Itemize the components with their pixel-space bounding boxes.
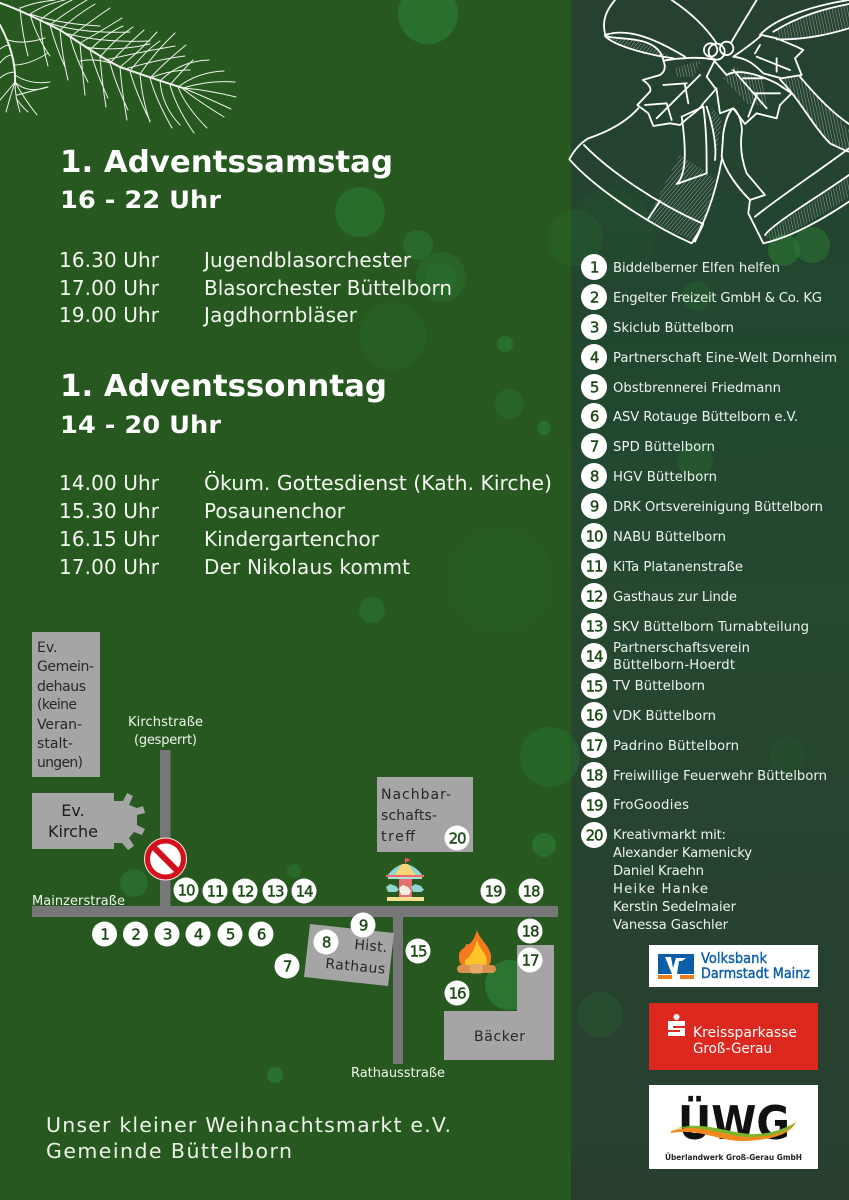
marker 18 lower	[518, 918, 542, 944]
label: Rathausstrasse: Rathausstraße	[351, 1066, 445, 1081]
icon: carousel	[386, 858, 424, 901]
legend item 19	[581, 792, 689, 818]
marker 13: 13	[267, 882, 284, 900]
marker 14	[292, 878, 316, 904]
legend item 20: Kerstin Sedelmaier	[613, 900, 737, 915]
legend item 16: VDK Büttelborn	[613, 709, 716, 724]
legend list	[581, 254, 837, 933]
legend item 13: SKV Büttelborn Turnabteilung	[613, 620, 809, 635]
legend item 11: KiTa Platanenstraße	[613, 560, 743, 575]
schedule: Sunday: 16.15 Uhr	[59, 527, 160, 551]
legend item 8	[581, 463, 717, 489]
building: Ev. Kirche	[32, 793, 145, 850]
building: Ev. Gemeindehaus	[32, 632, 100, 777]
legend item 16: 16	[586, 706, 603, 724]
building: Hist. Rathaus: Hist.	[354, 937, 388, 956]
building: Hist. Rathaus	[304, 924, 394, 986]
marker 4	[186, 922, 210, 946]
building: Baecker	[444, 945, 554, 1060]
bokeh lights	[120, 0, 830, 1083]
building: Baecker: Bäcker	[474, 1029, 525, 1045]
background: dark sidebar	[571, 0, 849, 1200]
marker 20: 20	[449, 830, 466, 848]
marker 11	[202, 878, 228, 904]
marker 6	[248, 922, 274, 946]
building: Ev. Gemeindehaus: Veran-	[37, 717, 82, 733]
legend item 2	[581, 284, 822, 310]
legend item 18	[581, 762, 827, 788]
legend item 17	[581, 732, 739, 758]
legend item 11	[581, 553, 743, 579]
legend item 20: Heike Hanke	[613, 882, 708, 897]
legend item 6: 6	[590, 408, 599, 426]
legend item 18: Freiwillige Feuerwehr Büttelborn	[613, 769, 827, 784]
marker 11: 11	[207, 882, 224, 900]
legend item 6: ASV Rotauge Büttelborn e.V.	[613, 410, 798, 425]
schedule: Sunday: 14.00 Uhr	[59, 471, 160, 495]
legend item 5: Obstbrennerei Friedmann	[613, 381, 781, 396]
logo: UEWG: Überlandwerk Groß-Gerau GmbH	[665, 1152, 802, 1162]
legend item 10: 10	[586, 528, 603, 546]
marker 16	[444, 980, 470, 1006]
building: Ev. Gemeindehaus: dehaus	[37, 679, 86, 695]
marker 12	[232, 878, 258, 904]
legend item 7	[581, 433, 715, 459]
footer text	[46, 1113, 451, 1163]
legend item 19: 19	[586, 796, 603, 814]
marker 3	[154, 922, 180, 946]
building: Nachbarschaftstreff: schafts-	[381, 808, 437, 824]
legend item 3: Skiclub Büttelborn	[613, 321, 734, 336]
schedule: Sunday: 15.30 Uhr	[59, 499, 160, 523]
schedule: Sunday: Der Nikolaus kommt	[204, 555, 410, 579]
building: Nachbarschaftstreff: treff	[381, 829, 415, 845]
legend item 1: 1	[590, 258, 599, 276]
marker 10: 10	[178, 882, 195, 900]
marker 2	[123, 922, 148, 946]
legend item 12	[581, 583, 737, 609]
legend item 4: Partnerschaft Eine-Welt Dornheim	[613, 351, 837, 366]
legend item 10	[581, 523, 726, 549]
marker 13	[262, 878, 288, 904]
building: Ev. Gemeindehaus: Ev.	[37, 640, 58, 656]
legend item 5	[581, 374, 781, 400]
location markers	[92, 826, 544, 1006]
building: Ev. Kirche: Kirche	[48, 822, 98, 841]
legend item 9: DRK Ortsvereinigung Büttelborn	[613, 500, 823, 515]
legend item 4: 4	[590, 348, 599, 366]
legend item 20: Daniel Kraehn	[613, 864, 704, 879]
marker 1: 1	[100, 926, 109, 944]
legend item 20	[581, 822, 752, 933]
marker 17	[518, 948, 542, 972]
marker 18 lower: 18	[522, 922, 539, 940]
marker 20	[444, 826, 470, 850]
hours: Sunday: 14 - 20 Uhr	[60, 411, 221, 439]
building: Hist. Rathaus: Rathaus	[325, 956, 386, 978]
label: Mainzerstrasse: Mainzerstraße	[32, 894, 125, 909]
marker 5: 5	[226, 926, 235, 944]
legend item 12: Gasthaus zur Linde	[613, 590, 737, 605]
legend item 14: Partnerschaftsverein	[613, 641, 750, 656]
legend item 6	[581, 403, 798, 429]
marker 2: 2	[131, 926, 140, 944]
legend item 19: FroGoodies	[613, 798, 689, 813]
legend item 9	[581, 493, 823, 519]
schedule: Saturday	[59, 248, 452, 327]
icon: pine branch	[0, 0, 236, 133]
legend item 8: HGV Büttelborn	[613, 470, 717, 485]
map	[32, 632, 558, 1081]
legend item 9: 9	[590, 498, 599, 516]
marker 19	[480, 878, 506, 904]
marker 7: 7	[283, 958, 292, 976]
legend item 17: 17	[586, 736, 603, 754]
legend item 14: 14	[586, 648, 603, 666]
legend item 3: 3	[590, 318, 599, 336]
legend item 15: 15	[586, 678, 603, 696]
legend item 18: 18	[586, 766, 603, 784]
building: Nachbarschaftstreff: Nachbar-	[381, 787, 451, 803]
logo: Kreissparkasse: Kreissparkasse	[693, 1025, 797, 1041]
marker 1	[92, 922, 117, 946]
schedule: Saturday: Blasorchester Büttelborn	[204, 276, 452, 300]
road: Kirchstrasse	[160, 750, 170, 910]
icon: bells with holly	[569, 0, 849, 243]
logo: Volksbank	[649, 945, 818, 987]
legend item 7: 7	[590, 438, 599, 456]
legend item 16	[581, 702, 716, 728]
marker 9: 9	[359, 916, 368, 934]
legend item 15: TV Büttelborn	[612, 679, 705, 694]
marker 17: 17	[522, 952, 539, 970]
title: first Advent Sunday: 1. Adventssonntag	[60, 369, 387, 404]
marker 14: 14	[296, 882, 313, 900]
schedule: Saturday: Jagdhornbläser	[202, 303, 358, 327]
building: Ev. Gemeindehaus: (keine	[37, 697, 77, 713]
logo: Kreissparkasse: Groß-Gerau	[693, 1041, 772, 1057]
marker 18 upper: 18	[523, 882, 540, 900]
schedule: Sunday	[59, 471, 552, 579]
label: Kirchstrasse	[128, 715, 203, 748]
building: Ev. Gemeindehaus: stalt-	[37, 736, 73, 752]
label: Kirchstrasse: (gesperrt)	[134, 733, 197, 748]
schedule: Saturday: 19.00 Uhr	[59, 303, 160, 327]
marker 8	[314, 930, 338, 954]
background: green main area	[0, 0, 571, 1200]
marker 8: 8	[322, 934, 331, 952]
legend item 3	[581, 314, 734, 340]
footer text: Unser kleiner Weihnachtsmarkt e.V.	[46, 1113, 451, 1137]
logo: UEWG	[649, 1085, 818, 1169]
icon: no-entry sign	[144, 838, 186, 880]
schedule: Sunday: Ökum. Gottesdienst (Kath. Kirche)	[204, 471, 552, 495]
marker 16: 16	[449, 984, 466, 1002]
building: Ev. Gemeindehaus: Gemein-	[37, 659, 94, 675]
legend item 15	[581, 673, 705, 699]
legend item 20: Kreativmarkt mit:	[613, 828, 726, 843]
marker 12: 12	[237, 882, 254, 900]
label: Kirchstrasse: Kirchstraße	[128, 715, 203, 730]
legend item 14: Büttelborn-Hoerdt	[613, 658, 735, 673]
schedule: Saturday: 16.30 Uhr	[59, 248, 160, 272]
schedule: Saturday: Jugendblasorchester	[202, 248, 412, 272]
legend item 10: NABU Büttelborn	[613, 530, 726, 545]
marker 5	[218, 922, 242, 946]
title: first Advent Saturday: 1. Adventssamstag	[60, 145, 393, 180]
legend item 13	[581, 613, 809, 639]
building: Ev. Gemeindehaus: ungen)	[37, 755, 83, 771]
road: Mainzerstrasse	[32, 906, 558, 917]
legend item 7: SPD Büttelborn	[613, 440, 715, 455]
legend item 11: 11	[586, 558, 603, 576]
schedule: Sunday: Kindergartenchor	[204, 527, 380, 551]
legend item 2: 2	[590, 288, 599, 306]
marker 3: 3	[163, 926, 172, 944]
schedule: Saturday: 17.00 Uhr	[59, 276, 160, 300]
legend item 2: Engelter Freizeit GmbH & Co. KG	[613, 291, 822, 306]
building: Ev. Kirche: Ev.	[61, 801, 85, 820]
legend item 14	[581, 641, 750, 673]
logo: Volksbank: Volksbank	[701, 951, 768, 967]
legend item 8: 8	[590, 468, 599, 486]
hours: Saturday: 16 - 22 Uhr	[60, 186, 221, 214]
marker 10	[174, 878, 198, 902]
legend item 12: 12	[586, 588, 603, 606]
legend item 13: 13	[586, 618, 603, 636]
legend item 20: Alexander Kamenicky	[613, 846, 752, 861]
legend item 4	[581, 344, 837, 370]
legend item 1	[581, 254, 780, 280]
icon: campfire	[457, 930, 496, 974]
logo: UEWG: ÜWG	[678, 1096, 790, 1150]
legend item 17: Padrino Büttelborn	[613, 739, 739, 754]
building: Nachbarschaftstreff	[377, 777, 473, 852]
logo: Volksbank: Darmstadt Mainz	[701, 966, 810, 982]
legend item 1: Biddelberner Elfen helfen	[613, 261, 780, 276]
marker 19: 19	[485, 882, 502, 900]
legend item 5: 5	[590, 378, 599, 396]
footer text: Gemeinde Büttelborn	[46, 1139, 292, 1163]
schedule: Sunday: Posaunenchor	[204, 499, 346, 523]
marker 15	[406, 938, 430, 964]
marker 7	[274, 954, 300, 978]
road: Rathausstrasse	[393, 917, 403, 1064]
logo: Kreissparkasse	[649, 1003, 818, 1070]
marker 4: 4	[194, 926, 203, 944]
schedule: Sunday: 17.00 Uhr	[59, 555, 160, 579]
legend item 20: 20	[586, 826, 603, 844]
marker 15: 15	[410, 942, 427, 960]
marker 9	[350, 912, 376, 938]
marker 6: 6	[257, 926, 266, 944]
marker 18 upper	[518, 878, 544, 904]
legend item 20: Vanessa Gaschler	[613, 918, 729, 933]
